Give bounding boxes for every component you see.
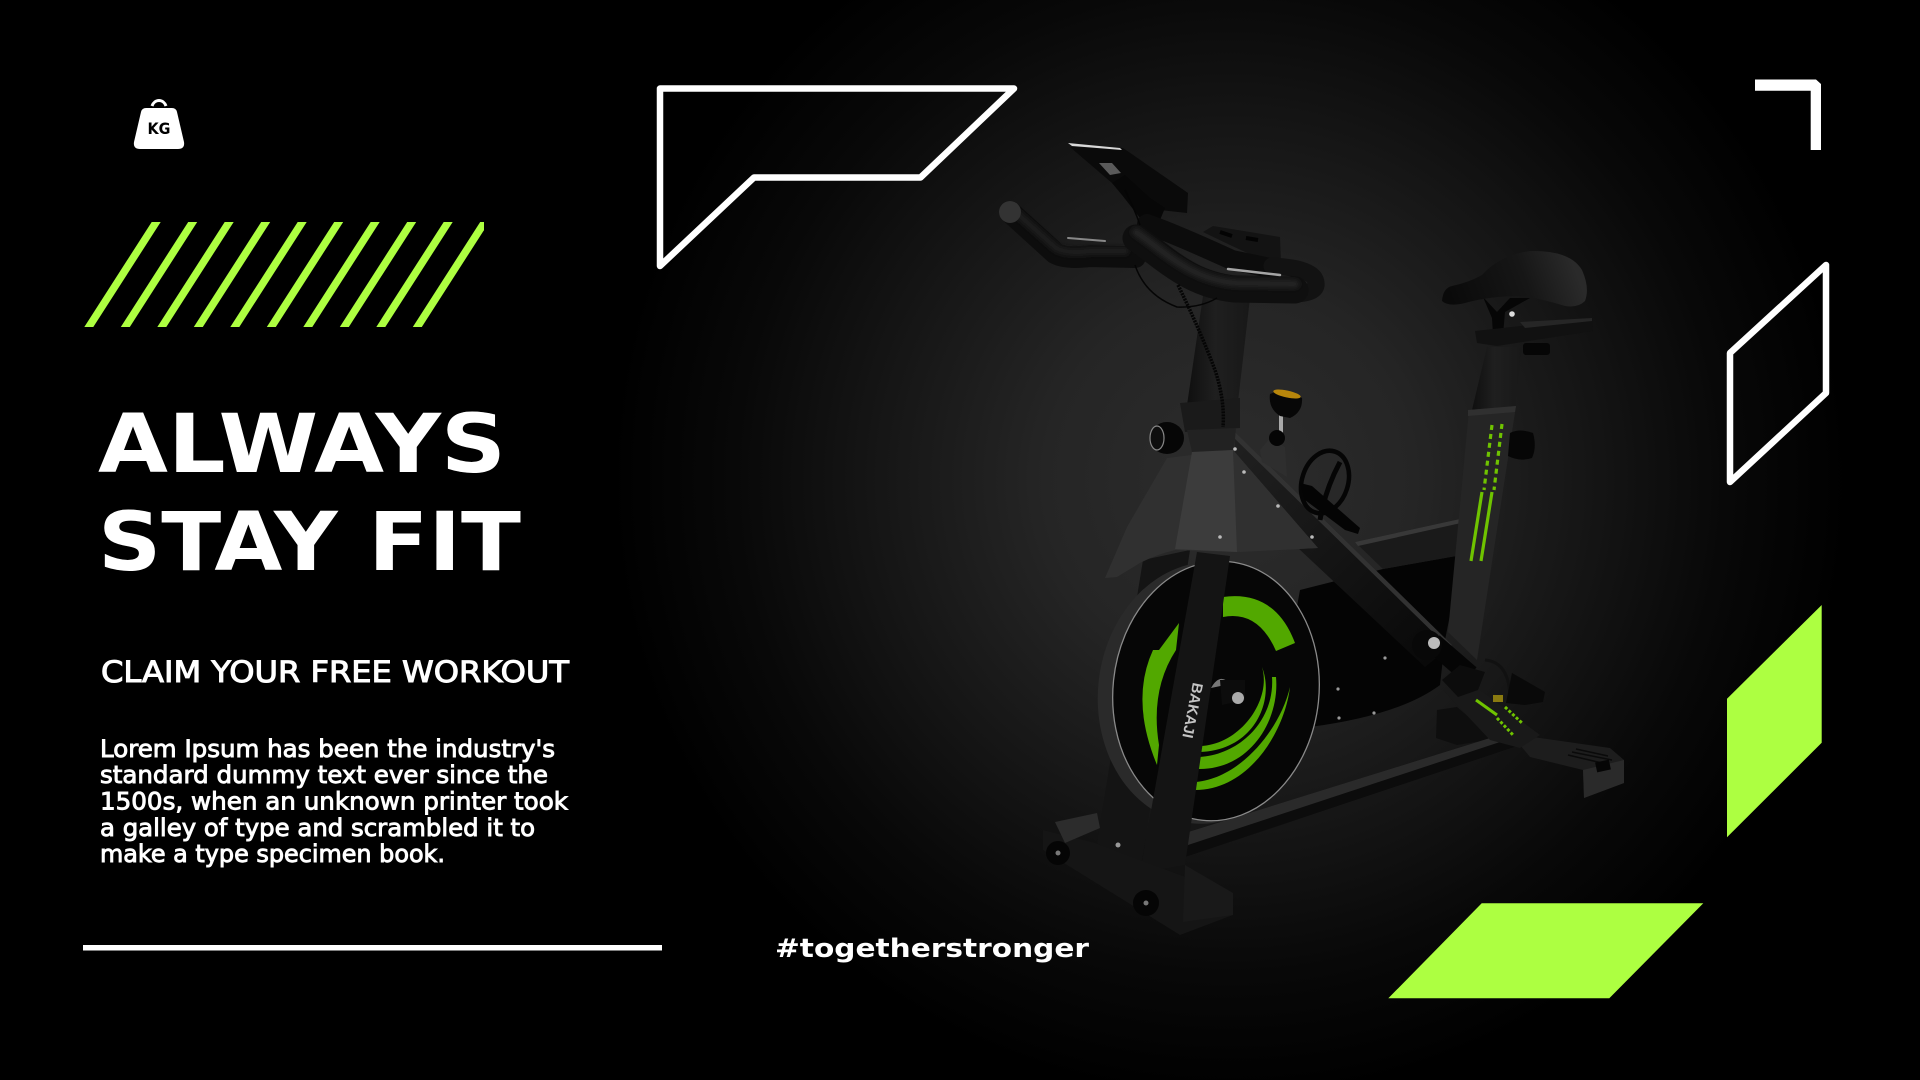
base cross bar: [1185, 738, 1520, 857]
console tablet: [1068, 143, 1188, 220]
cross beam: [1355, 519, 1462, 569]
body text: [100, 735, 568, 868]
seat clamp: [1483, 297, 1530, 335]
green parallelogram right: [1727, 605, 1822, 837]
lower collar: [1187, 428, 1236, 452]
rear foot bracket: [1436, 707, 1490, 745]
near handlebar: [1136, 232, 1316, 294]
exercise bike: [999, 143, 1624, 935]
hashtag: #togetherstronger: [775, 934, 1089, 964]
green parallelogram bottom: [1388, 903, 1703, 998]
body text: Lorem Ipsum has been the industry's: [100, 735, 555, 763]
bottle holder: [1293, 444, 1360, 534]
front fork leg: [1140, 552, 1230, 873]
resistance knob: [1260, 388, 1302, 477]
rear support: [1443, 690, 1540, 748]
crank arm: [1433, 643, 1470, 675]
front foot: [1043, 813, 1233, 935]
saddle: [1442, 251, 1587, 306]
flywheel hub: [1211, 679, 1245, 705]
outline speech shape: [660, 88, 1014, 266]
title: STAY FIT: [98, 496, 521, 590]
flywheel: [1085, 551, 1332, 834]
main diagonal beam: [1232, 432, 1452, 667]
title: ALWAYS: [98, 398, 506, 492]
rear foot: [1520, 737, 1624, 798]
left knob: [1150, 422, 1184, 454]
body text: standard dummy text ever since the: [100, 761, 548, 789]
subheading: CLAIM YOUR FREE WORKOUT: [101, 655, 569, 689]
crank pivot: [1412, 630, 1442, 660]
icon: kg weight: KG: [148, 119, 170, 138]
body text: 1500s, when an unknown printer took: [100, 788, 568, 816]
body text: a galley of type and scrambled it to: [100, 814, 535, 842]
housing bolts: [1336, 656, 1387, 720]
front fairing: [1105, 450, 1318, 578]
corner bracket: [1755, 80, 1821, 150]
outline parallelogram: [1730, 265, 1826, 482]
body text: make a type specimen book.: [100, 840, 445, 868]
icon: kg weight: [134, 101, 184, 149]
brand text: BAKAJI: [1178, 681, 1206, 739]
seat post knobs: [1508, 343, 1550, 460]
rear console block: [1203, 226, 1281, 263]
black housing: [1280, 555, 1462, 727]
cables: [1125, 190, 1223, 427]
far handlebar: [999, 201, 1135, 257]
fairing bolts: [1218, 447, 1314, 539]
flywheel green arcs: [1142, 596, 1295, 790]
rear fork leg: [1097, 550, 1190, 873]
upper collar: [1180, 398, 1240, 432]
seat slider: [1475, 311, 1593, 346]
divider line: [83, 945, 662, 950]
green support stripes: [1476, 700, 1522, 736]
inner handlebar tube: [1147, 224, 1270, 268]
handlebar stem: [1187, 296, 1250, 405]
seat post: [1448, 347, 1522, 660]
title: [98, 398, 521, 590]
green post stripes: [1471, 424, 1502, 561]
pedal: [1442, 660, 1545, 705]
green diagonal stripes: [84, 222, 489, 327]
